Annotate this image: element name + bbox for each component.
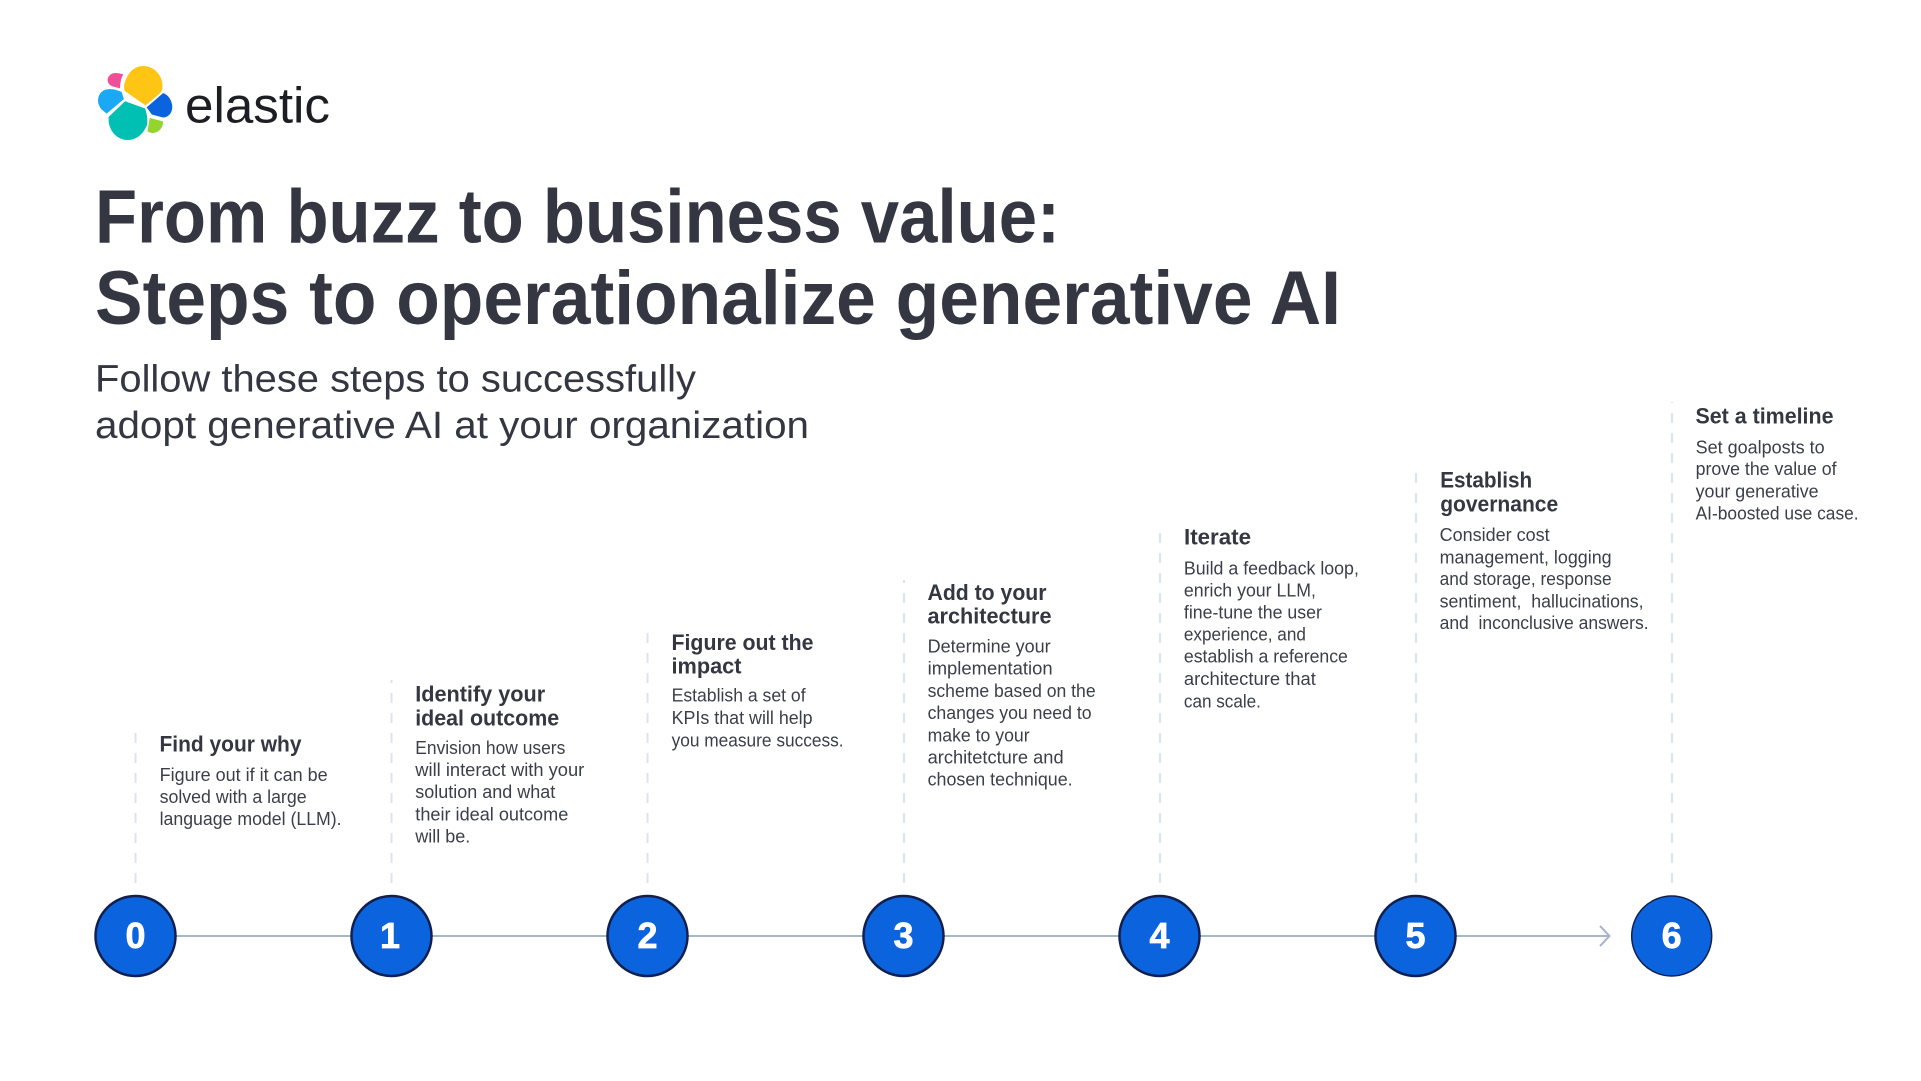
heading: impact — [672, 653, 742, 678]
description: management, logging — [1440, 547, 1612, 567]
number badge 3: 3 — [893, 915, 914, 956]
number badge 0 — [96, 896, 176, 976]
number badge 5: 5 — [1405, 915, 1426, 956]
number badge 6: 6 — [1662, 915, 1682, 956]
title: From buzz to business value: — [95, 175, 1060, 260]
title: Steps to operationalize generative AI — [95, 256, 1341, 341]
number badge 4 — [1120, 896, 1200, 976]
description: experience, and — [1184, 624, 1306, 644]
description — [160, 765, 342, 829]
number badge 4: 4 — [1149, 915, 1170, 956]
heading: Set a timeline — [1696, 403, 1834, 428]
title — [95, 175, 1341, 341]
number badge 0: 0 — [125, 915, 146, 956]
description: Establish a set of — [672, 686, 807, 706]
heading: Identify your — [415, 682, 546, 707]
description: you measure success. — [672, 730, 844, 750]
step 1: identify your ideal outcome — [392, 680, 584, 883]
description — [1696, 437, 1859, 523]
logo: elastic — [97, 66, 330, 140]
description: scheme based on the — [928, 681, 1096, 701]
description: changes you need to — [928, 703, 1092, 723]
description: Envision how users — [415, 738, 565, 758]
description: architecture that — [1184, 669, 1316, 689]
heading: governance — [1440, 491, 1558, 516]
number badge 3 — [864, 896, 944, 976]
icon: elastic logo mark — [97, 66, 173, 140]
heading: Establish — [1440, 468, 1532, 493]
description: Build a feedback loop, — [1184, 558, 1359, 578]
description: establish a reference — [1184, 646, 1348, 666]
subtitle: adopt generative AI at your organization — [95, 405, 809, 447]
heading — [928, 580, 1052, 628]
description: Set goalposts to — [1696, 437, 1825, 457]
heading: architecture — [928, 603, 1052, 628]
description: and storage, response — [1440, 569, 1612, 589]
description: KPIs that will help — [672, 708, 813, 728]
heading: Find your why — [160, 732, 302, 757]
description: Consider cost — [1440, 525, 1550, 545]
description: can scale. — [1184, 691, 1261, 711]
description: enrich your LLM, — [1184, 580, 1316, 600]
description: make to your — [928, 726, 1030, 746]
number badge 5 — [1376, 896, 1456, 976]
description — [672, 686, 844, 750]
description: implementation — [928, 658, 1053, 678]
step 0: find your why — [136, 732, 342, 883]
number badge 6 — [1632, 896, 1712, 976]
number badge 2: 2 — [637, 915, 658, 956]
description — [414, 738, 584, 847]
heading: Add to your — [928, 580, 1047, 605]
description: architetcture and — [928, 747, 1064, 767]
step 3: add to your architecture — [904, 580, 1096, 883]
description: prove the value of — [1696, 459, 1838, 479]
number badge 1: 1 — [380, 915, 400, 956]
description: your generative — [1696, 481, 1819, 501]
number badge 2 — [608, 896, 688, 976]
description — [1184, 558, 1359, 711]
logo wordmark: elastic — [185, 78, 330, 134]
step 2: figure out the impact — [648, 630, 844, 883]
description: sentiment, hallucinations, — [1440, 591, 1644, 611]
description: and inconclusive answers. — [1440, 613, 1649, 633]
description: solved with a large — [160, 787, 307, 807]
heading — [415, 682, 559, 731]
heading — [672, 630, 814, 678]
subtitle — [95, 359, 809, 447]
description: Figure out if it can be — [160, 765, 328, 785]
description — [928, 636, 1096, 789]
description: language model (LLM). — [160, 809, 342, 829]
step 4: iterate — [1160, 524, 1359, 883]
subtitle: Follow these steps to successfully — [95, 359, 696, 401]
description — [1440, 525, 1649, 633]
heading: Iterate — [1184, 524, 1251, 549]
description: Determine your — [928, 636, 1051, 656]
timeline arrow — [135, 926, 1610, 946]
description: their ideal outcome — [415, 804, 568, 824]
heading: Figure out the — [672, 630, 814, 655]
description: fine-tune the user — [1184, 602, 1322, 622]
description: AI-boosted use case. — [1696, 503, 1859, 523]
heading — [1440, 468, 1558, 516]
step 5: establish governance — [1416, 468, 1649, 883]
step 6: set a timeline — [1672, 402, 1859, 883]
description: chosen technique. — [928, 769, 1073, 789]
number badge 1 — [352, 896, 432, 976]
description: will interact with your — [414, 760, 584, 780]
heading: ideal outcome — [415, 706, 559, 731]
description: will be. — [414, 827, 470, 847]
description: solution and what — [415, 782, 555, 802]
